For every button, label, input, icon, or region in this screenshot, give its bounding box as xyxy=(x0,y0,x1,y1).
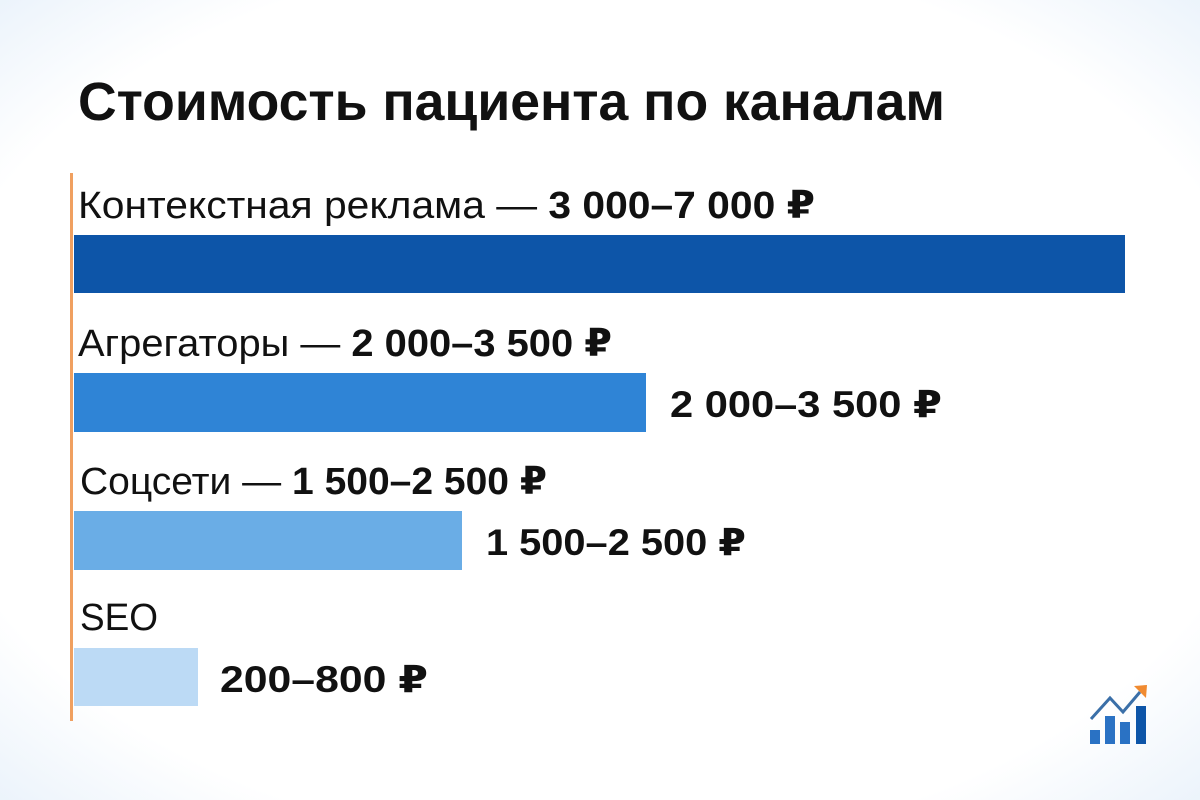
row: context ads: Контекстная реклама — 3 000–7 000 ₽ xyxy=(78,185,815,227)
row: social: 1 500–2 500 ₽ xyxy=(486,522,746,563)
axis line xyxy=(70,173,73,721)
row: social xyxy=(74,461,746,570)
icon: growth chart xyxy=(1090,685,1147,744)
title: Стоимость пациента по каналам xyxy=(78,72,945,132)
row: SEO xyxy=(74,597,428,706)
row: SEO: SEO xyxy=(80,597,158,639)
row: aggregators: Агрегаторы — 2 000–3 500 ₽ xyxy=(78,323,612,365)
row: context ads xyxy=(74,185,1125,293)
row: aggregators: 2 000–3 500 ₽ xyxy=(670,384,942,425)
row: SEO: 200–800 ₽ xyxy=(220,659,428,700)
row: aggregators xyxy=(74,323,942,432)
row: social: Соцсети — 1 500–2 500 ₽ xyxy=(80,461,547,503)
